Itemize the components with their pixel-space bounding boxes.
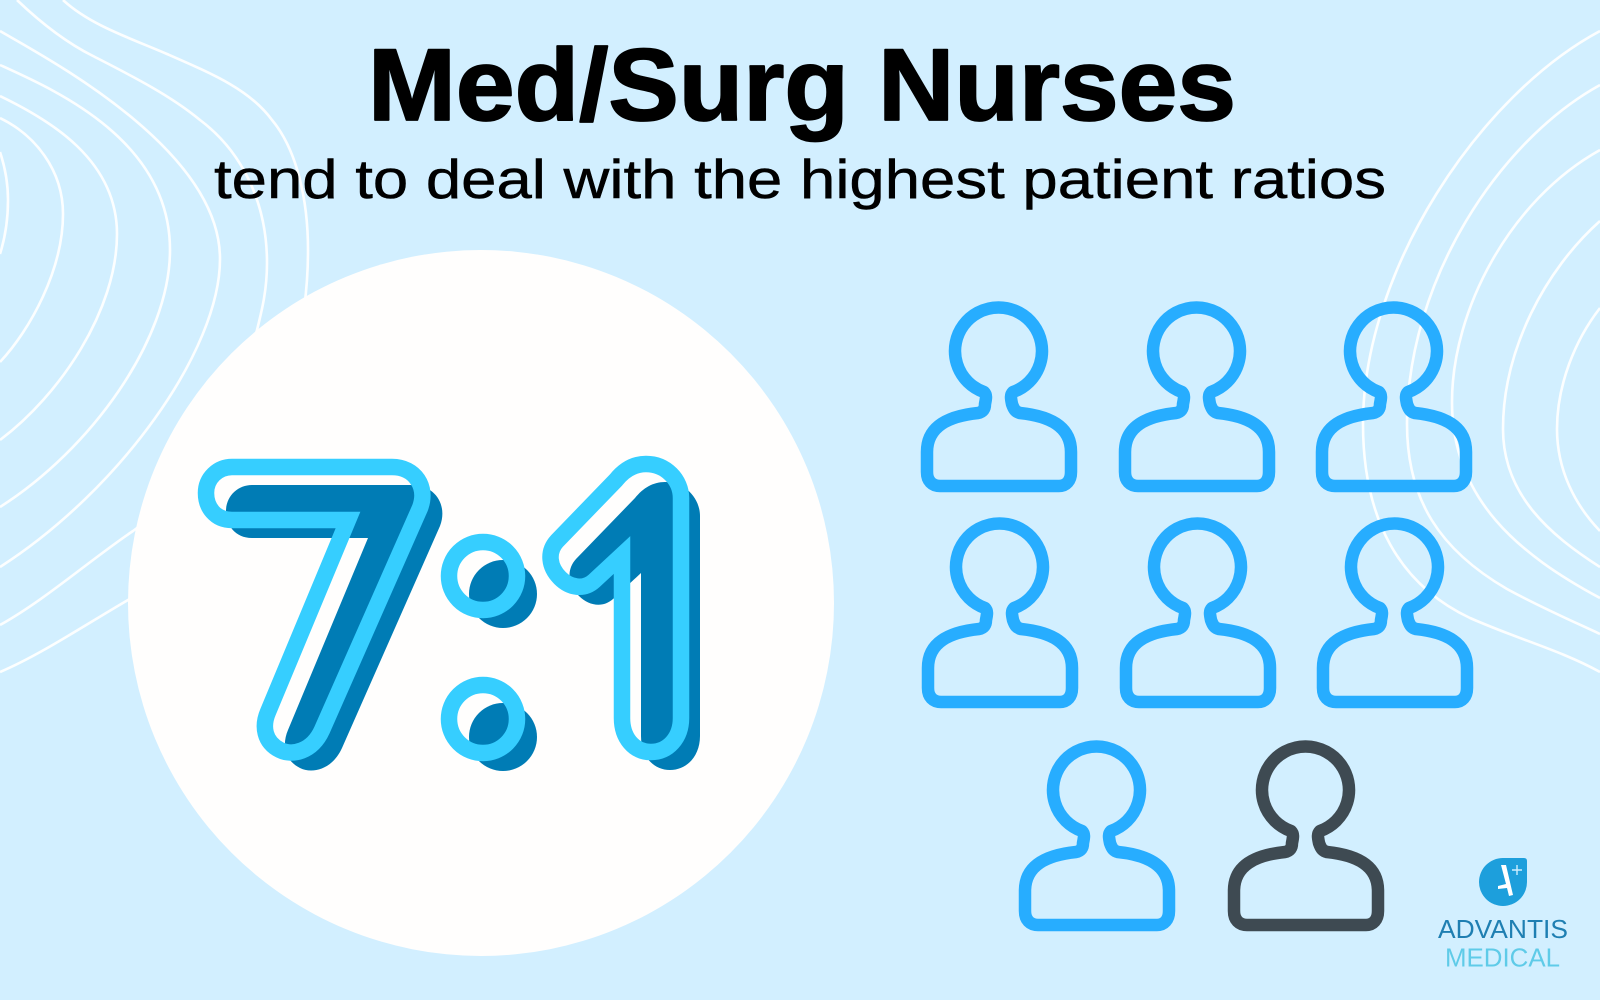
logo shield bbox=[1479, 858, 1527, 906]
nurse icon: one dark bbox=[1234, 746, 1378, 925]
logo wordmark: ADVANTIS bbox=[1438, 914, 1568, 944]
title: Med/Surg Nurses bbox=[368, 28, 1236, 142]
ratio: 7:1 bbox=[206, 464, 700, 771]
patient icons: seven blue bbox=[927, 307, 1467, 925]
logo: Advantis Medical: MEDICAL bbox=[1445, 942, 1560, 972]
logo: Advantis Medical bbox=[1438, 858, 1568, 972]
white ratio circle bbox=[128, 250, 834, 956]
subtitle: tend to deal with the highest patient ratios bbox=[214, 148, 1386, 210]
